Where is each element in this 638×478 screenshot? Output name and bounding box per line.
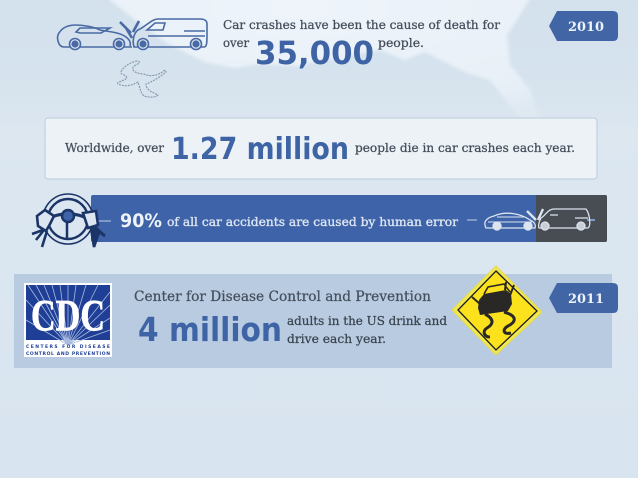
tag: 2010 (549, 11, 618, 41)
logo: CDC: CDC (31, 291, 105, 340)
icon: slippery road sign (452, 266, 542, 354)
text: crash intro: over (223, 36, 249, 50)
panel: worldwide: Worldwide, over (65, 140, 164, 155)
text: crash intro: Car crashes have been the cause of death for (223, 18, 500, 32)
panel: CDC statistic (14, 274, 612, 368)
text: drink and drive: adults in the US drink and (287, 314, 447, 328)
text: crash intro (223, 18, 500, 50)
text: drink and drive (287, 314, 447, 346)
panel: human error bar: of all car accidents are caused by human error (167, 214, 458, 229)
panel: worldwide (45, 118, 597, 179)
tag: 2011: 2011 (568, 292, 604, 307)
panel: worldwide: people die in car crashes each year. (355, 140, 575, 155)
icon: chalk body outline (118, 61, 166, 97)
panel: human error bar: 90% (120, 210, 162, 232)
logo: CDC: CENTERS FOR DISEASE (26, 344, 110, 350)
tag: 2011 (549, 283, 618, 313)
panel: worldwide: 1.27 million (171, 132, 349, 167)
logo: CDC: CONTROL AND PREVENTION (26, 351, 110, 357)
icon: car crash (58, 19, 207, 50)
map of the gulf coast (0, 0, 638, 130)
text: crash intro: people. (378, 36, 424, 50)
logo: CDC (24, 283, 112, 357)
heading: CDC name: Center for Disease Control and Prevention (134, 289, 431, 305)
tag: 2010: 2010 (568, 20, 604, 35)
number: 4 million: 4 million (138, 310, 282, 349)
icon: car crash small (485, 209, 590, 230)
panel: human error bar (91, 195, 607, 242)
icon: hands on steering wheel (32, 194, 105, 247)
number: 35,000: 35,000 (255, 34, 374, 72)
text: drink and drive: drive each year. (287, 332, 386, 346)
